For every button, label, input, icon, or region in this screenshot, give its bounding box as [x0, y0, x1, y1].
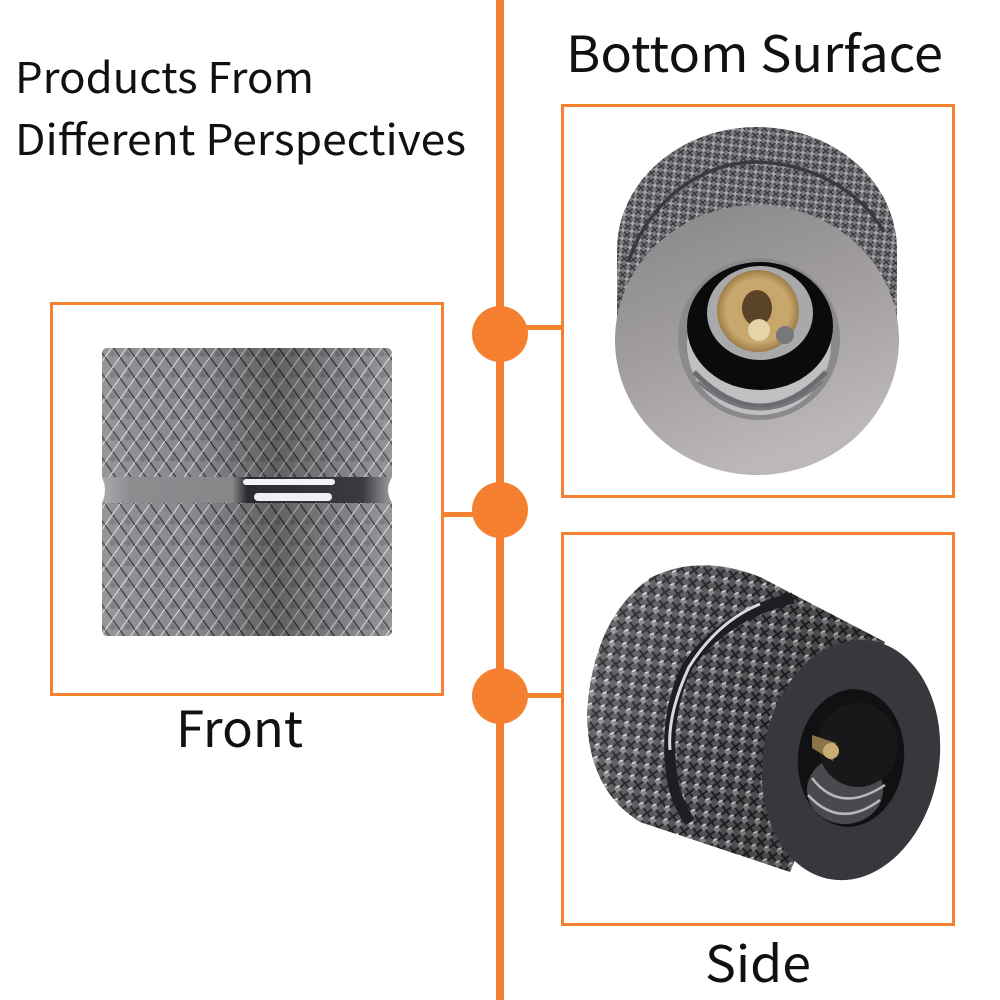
label: front: Front	[176, 690, 303, 762]
threads	[678, 258, 840, 420]
panel: front view	[52, 304, 442, 694]
brass core	[707, 266, 813, 360]
central vertical line	[496, 0, 504, 1000]
title	[15, 45, 466, 168]
black o-ring	[687, 262, 833, 390]
label: side: Side	[705, 925, 811, 997]
panel: bottom surface view	[562, 106, 954, 496]
title: Products From	[15, 45, 314, 106]
panel: side view	[562, 534, 959, 924]
heading: bottom surface: Bottom Surface	[566, 15, 943, 87]
connector: front	[443, 482, 528, 538]
connector: side	[472, 668, 562, 724]
photo: front knurled cylinder	[102, 348, 392, 636]
photo: side of adapter	[587, 565, 959, 894]
photo: bottom of adapter	[615, 127, 899, 475]
title: Different Perspectives	[15, 107, 466, 168]
connector: bottom surface	[472, 306, 562, 362]
